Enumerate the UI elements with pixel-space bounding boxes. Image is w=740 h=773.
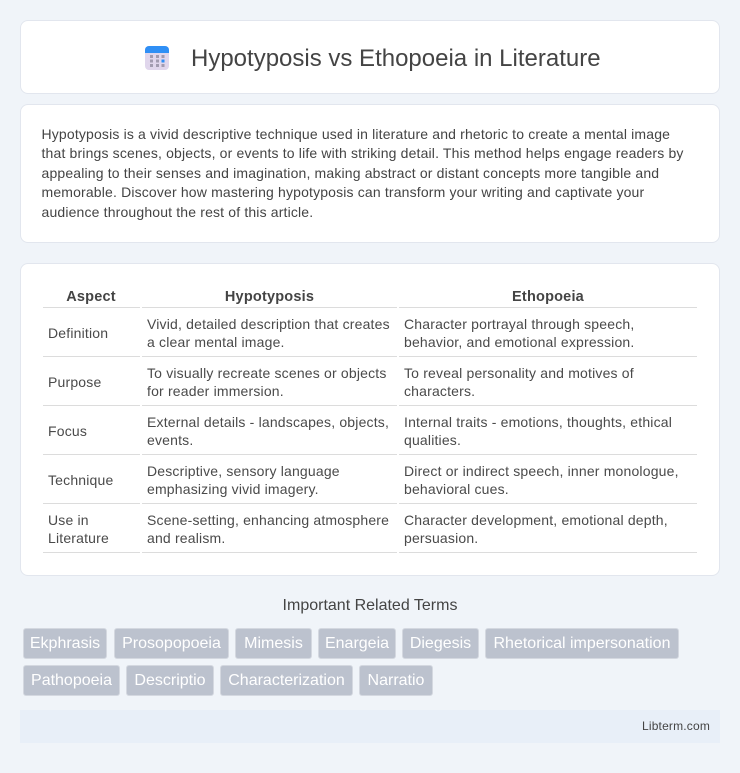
row: Technique	[48, 463, 679, 497]
text: To reveal personality and motives of	[404, 365, 634, 381]
text: Mimesis	[244, 635, 303, 652]
text: emphasizing vivid imagery.	[147, 481, 319, 497]
table heading: Hypotyposis: Hypotyposis	[225, 289, 314, 305]
text: a clear mental image.	[147, 334, 285, 350]
panel: comparison table	[20, 263, 720, 576]
panel: introduction	[20, 104, 720, 243]
table heading: Aspect: Aspect	[66, 289, 116, 305]
related term tags	[23, 628, 679, 696]
row: Definition	[48, 316, 634, 350]
text: Descriptive, sensory language	[147, 463, 340, 479]
table heading: Ethopoeia: Ethopoeia	[512, 289, 584, 305]
text: Character development, emotional depth,	[404, 512, 668, 528]
text: that brings scenes, objects, or events to life with striking detail. This method helps engage readers by	[42, 145, 684, 161]
text: Use in	[48, 512, 89, 528]
text: Vivid, detailed description that creates	[147, 316, 390, 332]
row: Use in Literature	[48, 512, 668, 546]
text: appealing to their senses and imagination, making abstract or distant concepts more tangible and	[42, 165, 659, 181]
text: events.	[147, 432, 193, 448]
text: audience throughout the rest of this article.	[42, 204, 313, 220]
footer bar	[20, 710, 720, 743]
text: Ekphrasis	[30, 635, 100, 652]
text: Internal traits - emotions, thoughts, ethical	[404, 414, 672, 430]
text: Technique	[48, 472, 113, 488]
text: Hypotyposis is a vivid descriptive technique used in literature and rhetoric to create a mental image	[42, 126, 670, 142]
table rules	[43, 307, 697, 553]
text: qualities.	[404, 432, 461, 448]
text: and realism.	[147, 530, 225, 546]
text: Literature	[48, 530, 109, 546]
title: Hypotyposis vs Ethopoeia in Literature	[191, 45, 601, 72]
text: Purpose	[48, 374, 101, 390]
text: Prosopopoeia	[122, 635, 221, 652]
text: Definition	[48, 325, 108, 341]
text: Focus	[48, 423, 87, 439]
text: for reader immersion.	[147, 383, 284, 399]
text: External details - landscapes, objects,	[147, 414, 389, 430]
icon: calendar	[145, 46, 169, 70]
row: Purpose	[48, 365, 634, 399]
intro text	[42, 126, 684, 220]
text: Rhetorical impersonation	[494, 635, 670, 652]
row: Focus	[48, 414, 672, 448]
text: characters.	[404, 383, 475, 399]
text: Scene-setting, enhancing atmosphere	[147, 512, 389, 528]
text: persuasion.	[404, 530, 478, 546]
text: Descriptio	[134, 672, 206, 689]
text: Characterization	[228, 672, 345, 689]
text: Pathopoeia	[31, 672, 112, 689]
text: Enargeia	[325, 635, 389, 652]
text: Diegesis	[410, 635, 471, 652]
header panel	[20, 20, 720, 94]
text: behavior, and emotional expression.	[404, 334, 634, 350]
text: Narratio	[368, 672, 424, 689]
text: To visually recreate scenes or objects	[147, 365, 387, 381]
text: Direct or indirect speech, inner monologue,	[404, 463, 679, 479]
text: behavioral cues.	[404, 481, 509, 497]
text: Character portrayal through speech,	[404, 316, 634, 332]
footer credit: Libterm.com	[642, 719, 710, 733]
text: memorable. Discover how mastering hypotyposis can transform your writing and captivate your	[42, 184, 644, 200]
heading: Important Related Terms: Important Related Terms	[283, 597, 457, 614]
